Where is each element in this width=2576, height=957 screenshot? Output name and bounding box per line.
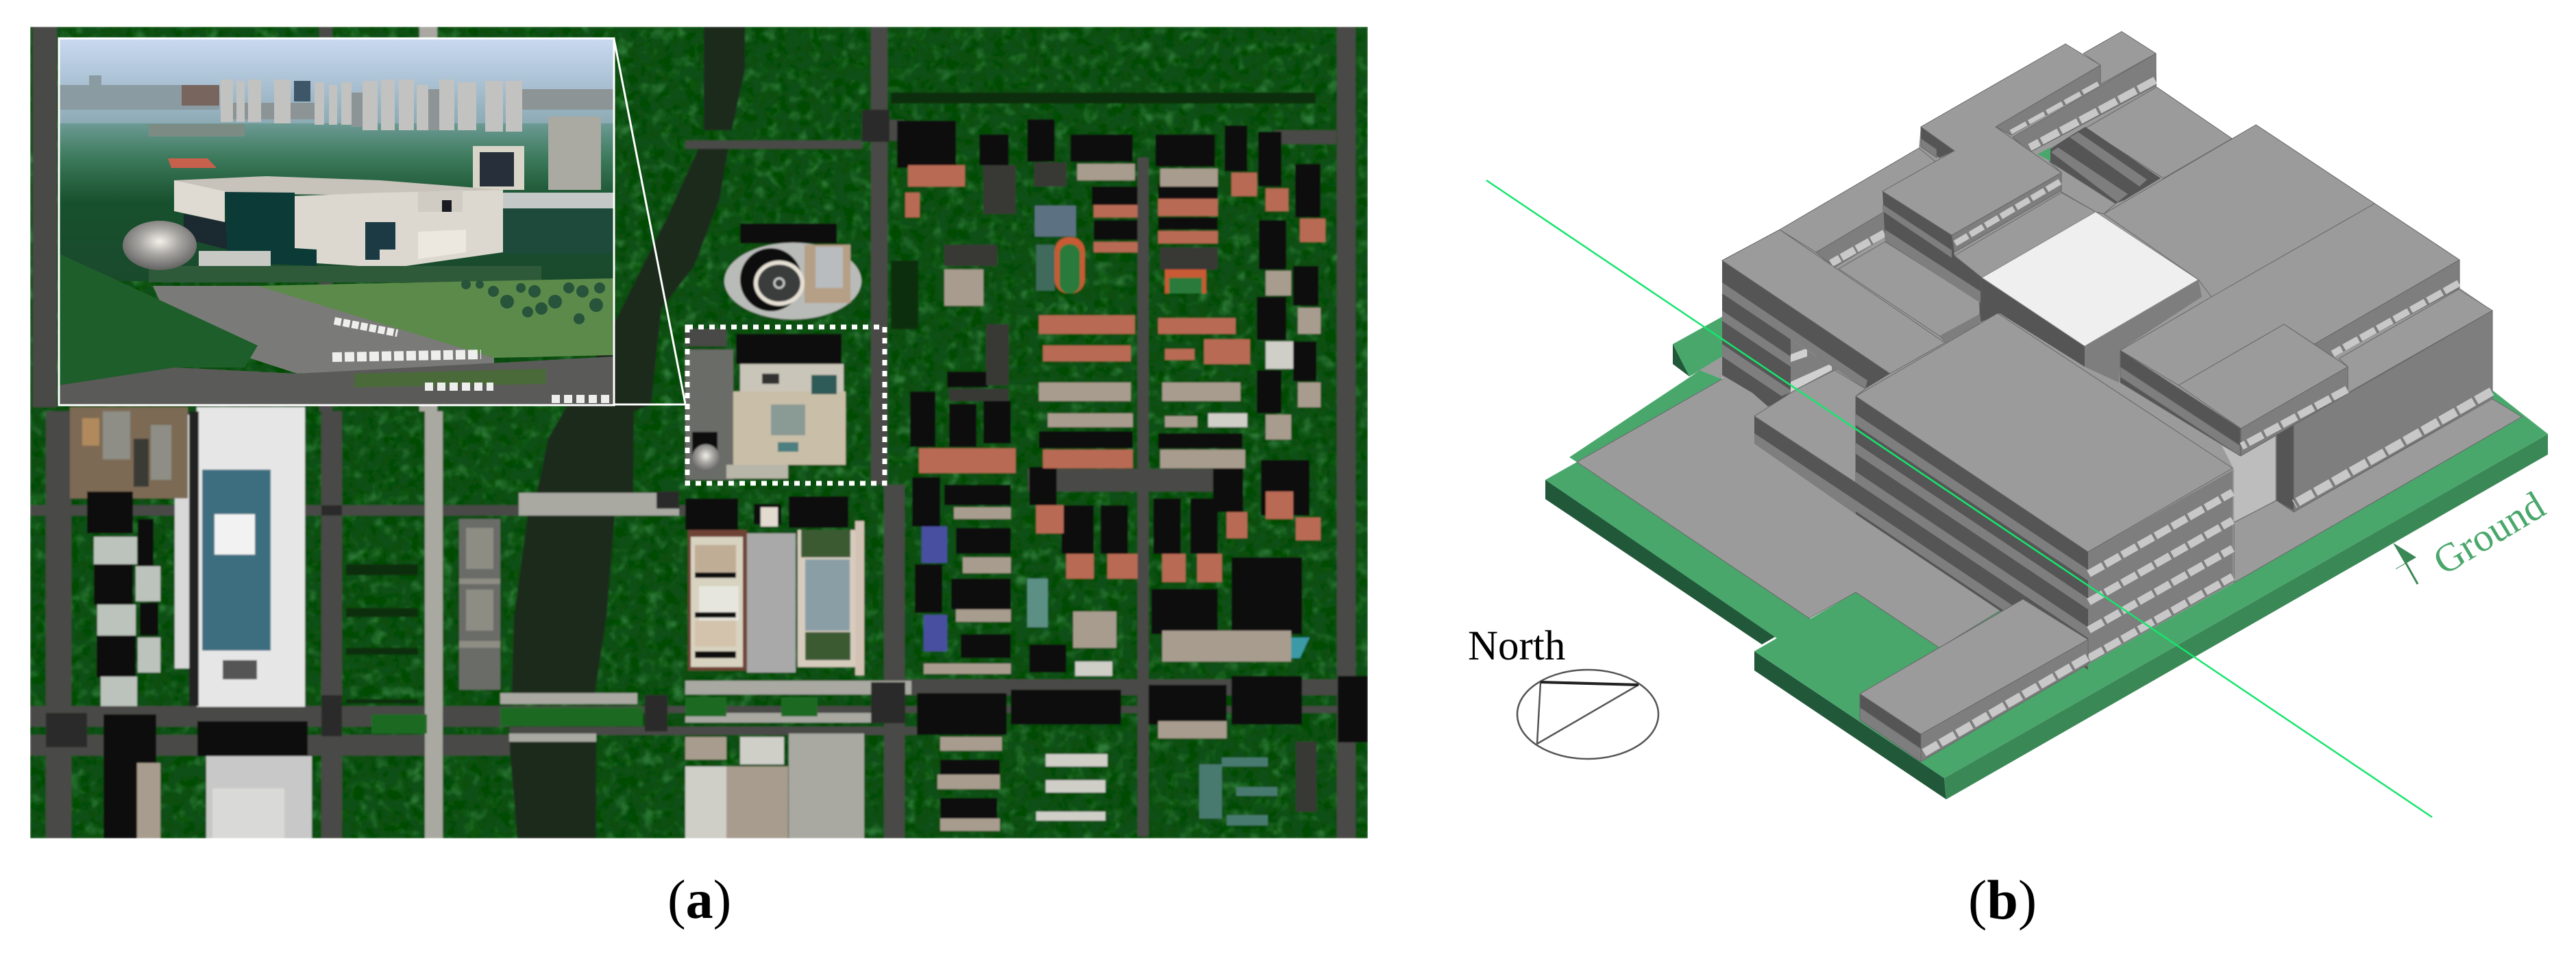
tree shadow bands	[346, 93, 1316, 703]
exhibition hall with solar roof	[175, 407, 305, 707]
sky	[59, 38, 614, 131]
inset frame	[59, 38, 614, 405]
passage	[2222, 437, 2275, 522]
ground level platform	[1577, 379, 2001, 648]
towers behind museum	[473, 117, 614, 254]
gap under west beam	[1791, 339, 1843, 392]
main front block	[1856, 313, 2233, 670]
buses	[332, 321, 613, 399]
rear bar A	[2013, 32, 2156, 152]
museum building	[174, 176, 503, 268]
central axis museums	[688, 507, 864, 675]
white rooftops	[685, 341, 1293, 838]
dark grey rooftops	[944, 162, 1316, 812]
small platform wedge	[1689, 356, 1722, 379]
parking lot	[153, 286, 494, 374]
red roof	[168, 158, 217, 168]
inset photo of museum	[59, 38, 614, 405]
map vegetation base	[30, 27, 1368, 838]
north-east big roof	[2104, 125, 2460, 385]
callout: dashed site box	[687, 327, 885, 483]
small box E	[2120, 324, 2348, 456]
west stepped facade	[1722, 261, 1890, 407]
grass lawn	[258, 278, 614, 358]
south-east low platform	[2234, 399, 2522, 583]
skyline	[59, 75, 614, 136]
museum roof in dashed box	[692, 364, 846, 478]
building footprint fill	[1722, 32, 2492, 664]
arrow	[2394, 544, 2418, 584]
tan and grey rooftops	[137, 164, 1321, 838]
silver sphere	[123, 221, 197, 270]
ground slab	[1545, 317, 2548, 799]
ground text: Ground	[2425, 483, 2553, 583]
low white hall and planting	[149, 251, 541, 282]
round science building	[724, 243, 861, 319]
callout: connector lines to inset	[614, 39, 685, 404]
office towers	[94, 537, 160, 706]
wing K west face	[1754, 370, 1865, 514]
section line	[1486, 180, 2432, 817]
forest foreground	[59, 254, 258, 385]
central dark wall	[1882, 191, 1982, 324]
back left roof	[1780, 148, 1954, 267]
roof by courtyard	[1954, 193, 2096, 278]
road and planted median	[59, 356, 614, 405]
east tall block	[2277, 289, 2492, 512]
compass ellipse	[1517, 670, 1658, 759]
lawn trees	[461, 280, 605, 324]
distant forest	[59, 123, 614, 281]
dark stripes behind courtyard	[2050, 127, 2161, 204]
road median greens	[371, 697, 818, 734]
salmon rooftops	[905, 165, 1325, 582]
plazas and paths	[419, 27, 911, 838]
light tree canopy	[30, 27, 1368, 838]
north compass	[1468, 623, 1658, 759]
lower exhibition hall	[206, 756, 312, 838]
lower strip of middle roof	[1939, 314, 1980, 343]
middle roof	[1839, 241, 1980, 343]
small green gap	[2037, 147, 2050, 161]
school running tracks	[1035, 206, 1206, 293]
panel: aerial map	[30, 27, 1368, 838]
white atrium block	[1980, 212, 2202, 383]
front wing	[1860, 599, 2088, 762]
panel: 3D building model	[1545, 32, 2548, 799]
north label: North	[1468, 623, 1565, 669]
rear roof C	[2085, 87, 2232, 178]
caption (b): (b)	[1968, 869, 2037, 931]
purple and teal roofs	[922, 526, 947, 651]
river	[509, 27, 745, 838]
ground label with arrow	[2394, 483, 2553, 584]
upper L-shaped block	[1882, 44, 2100, 252]
shadows of buildings	[87, 119, 1368, 838]
construction site	[70, 407, 188, 498]
caption (a): (a)	[667, 870, 731, 930]
roads and bridges	[30, 27, 1368, 838]
dark tree canopy	[30, 27, 1368, 838]
courtyard roof between blocks	[2049, 161, 2115, 214]
west big roof	[1722, 230, 1945, 374]
